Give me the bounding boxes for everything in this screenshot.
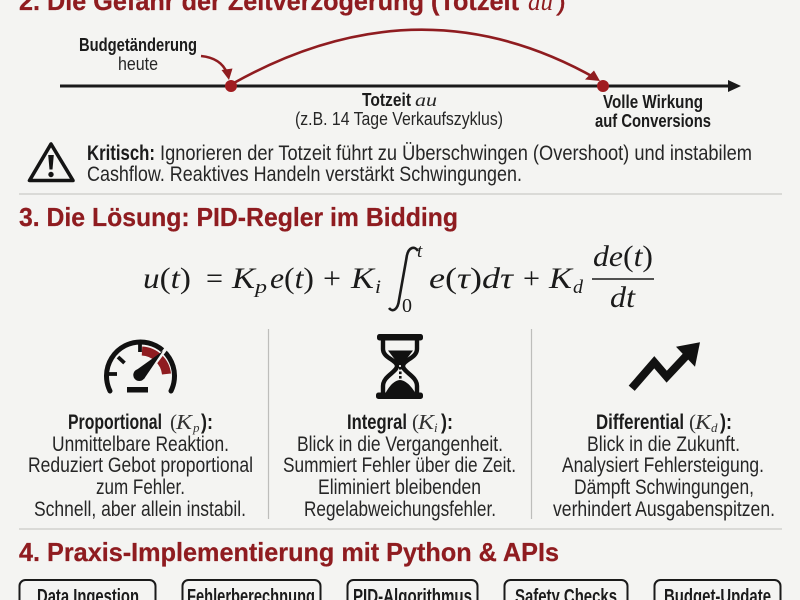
text: integral description: Blick in die Vergangenheit. — [297, 433, 503, 456]
label: full effect: Volle Wirkung — [603, 92, 703, 112]
process flow: implementation steps — [20, 580, 780, 600]
formula: PID controller: = — [206, 262, 223, 295]
text: proportional description: Reduziert Gebot proportional — [28, 454, 253, 477]
text: integral description: Regelabweichungsfehler. — [304, 498, 496, 521]
text: integral description — [283, 410, 516, 521]
text: proportional description: Unmittelbare Reaktion. — [52, 433, 229, 456]
callout: critical warning — [87, 142, 752, 186]
text: differential description: Analysiert Fehlersteigung. — [562, 454, 764, 477]
callout: critical warning: Kritisch: — [87, 142, 155, 165]
step: safety checks — [504, 580, 628, 600]
formula: PID controller: u(t) — [143, 262, 191, 295]
formula: PID controller: K — [350, 262, 376, 295]
text: proportional description: K — [175, 410, 193, 434]
formula: PID controller: + — [523, 262, 540, 295]
text: differential description: Blick in die Zukunft. — [587, 433, 740, 456]
text: proportional description: ): — [201, 411, 213, 434]
formula: PID controller: i — [375, 277, 381, 298]
arrow: budget change pointer — [201, 56, 232, 80]
formula: PID controller: p — [252, 277, 267, 298]
text: integral description: i — [434, 420, 438, 435]
text: differential description: ): — [720, 411, 732, 434]
text: differential description: Dämpft Schwingungen, — [574, 476, 754, 499]
arc arrow: dead time span — [232, 30, 600, 84]
formula: PID controller: 0 — [402, 295, 412, 317]
formula: PID controller: e(τ)dτ — [429, 262, 515, 295]
formula: PID controller: dt — [610, 281, 636, 314]
label: full effect — [595, 92, 711, 131]
marker: full effect — [597, 80, 609, 92]
text: integral description: Integral — [347, 411, 407, 434]
icon: speedometer — [107, 342, 174, 392]
heading: section 3: 3. Die Lösung: PID-Regler im Bidding — [19, 202, 458, 232]
formula: PID controller: d — [573, 277, 584, 298]
text: integral description: Summiert Fehler über die Zeit. — [283, 454, 516, 477]
icon: warning triangle — [30, 144, 73, 180]
text: differential description: Differential — [596, 411, 684, 434]
label: full effect: auf Conversions — [595, 111, 711, 131]
callout: critical warning: Cashflow. Reaktives Handeln verstärkt Schwingungen. — [87, 163, 522, 186]
label: dead time: (z.B. 14 Tage Verkaufszyklus) — [295, 109, 503, 129]
text: proportional description: ( — [170, 410, 177, 434]
heading: section 4: 4. Praxis-Implementierung mit Python & APIs — [19, 537, 559, 567]
formula: PID controller: K — [231, 262, 257, 295]
text: integral description: Eliminiert bleibenden — [318, 476, 481, 499]
text: proportional description: Proportional — [68, 411, 162, 434]
label: budget change: heute — [118, 54, 158, 74]
timeline diagram: dead time — [60, 30, 741, 131]
icon: hourglass — [376, 334, 423, 399]
icon: rising trend arrow — [632, 342, 700, 388]
panel: integral — [283, 334, 516, 521]
formula: PID controller: de(t) — [593, 240, 653, 273]
text: proportional description: p — [192, 420, 200, 435]
label: dead time — [295, 90, 503, 129]
formula: PID controller: e(t) — [270, 262, 314, 295]
formula: PID controller: + — [323, 262, 341, 295]
formula: PID controller: K — [548, 262, 574, 295]
text: integral description: ): — [441, 411, 453, 434]
text: differential description: ( — [689, 410, 696, 434]
formula: PID controller — [143, 240, 654, 317]
step: error calculation — [182, 580, 320, 600]
label: dead time: Totzeit — [362, 90, 411, 110]
label: dead time: au — [415, 90, 437, 110]
timeline axis arrow — [60, 80, 741, 92]
panel: proportional — [28, 342, 253, 521]
text: differential description — [553, 410, 775, 521]
label: budget change: Budgetänderung — [79, 35, 197, 55]
label: budget change — [79, 35, 197, 74]
text: proportional description: zum Fehler. — [96, 476, 185, 499]
text: differential description: K — [694, 410, 712, 434]
text: integral description: K — [417, 410, 435, 434]
marker: budget change — [225, 80, 237, 92]
text: proportional description — [28, 410, 253, 521]
text: integral description: ( — [412, 410, 419, 434]
step: data ingestion — [20, 580, 156, 600]
text: proportional description: Schnell, aber allein instabil. — [34, 498, 246, 521]
text: differential description: d — [711, 420, 718, 435]
step: PID algorithm — [348, 580, 478, 600]
formula: PID controller: t — [417, 241, 423, 262]
step: budget update — [654, 580, 780, 600]
panel: differential — [553, 342, 775, 521]
